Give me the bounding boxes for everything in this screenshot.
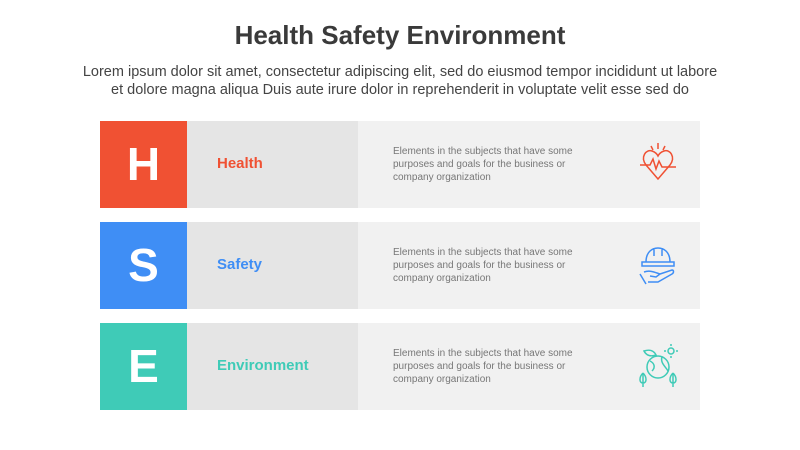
row: safety: S	[128, 239, 159, 291]
icon: heart	[640, 143, 676, 180]
row: health: Elements in the subjects that have some purposes and goals for the business or company organization	[393, 146, 573, 183]
subtitle: Lorem ipsum dolor sit amet, consectetur adipiscing elit, sed do eiusmod tempor incididunt ut labore	[83, 64, 717, 80]
title: Health Safety Environment	[235, 20, 565, 50]
row: health	[100, 121, 700, 208]
row: health: H	[127, 138, 160, 190]
subtitle: et dolore magna aliqua Duis aute irure dolor in reprehenderit in voluptate velit esse sed do	[111, 82, 689, 98]
row: environment	[100, 323, 700, 410]
row: environment: Environment	[217, 357, 309, 374]
row: safety: Elements in the subjects that have some purposes and goals for the business or company organization	[393, 247, 573, 284]
icon: helmet hand	[639, 247, 675, 284]
icon: earth plants	[639, 344, 678, 387]
row: environment: E	[128, 340, 159, 392]
subtitle	[83, 64, 717, 98]
row: safety: Safety	[217, 256, 262, 273]
row: safety	[100, 222, 700, 309]
row: environment: Elements in the subjects that have some purposes and goals for the business or company organization	[393, 348, 573, 385]
row: health: Health	[217, 155, 263, 172]
